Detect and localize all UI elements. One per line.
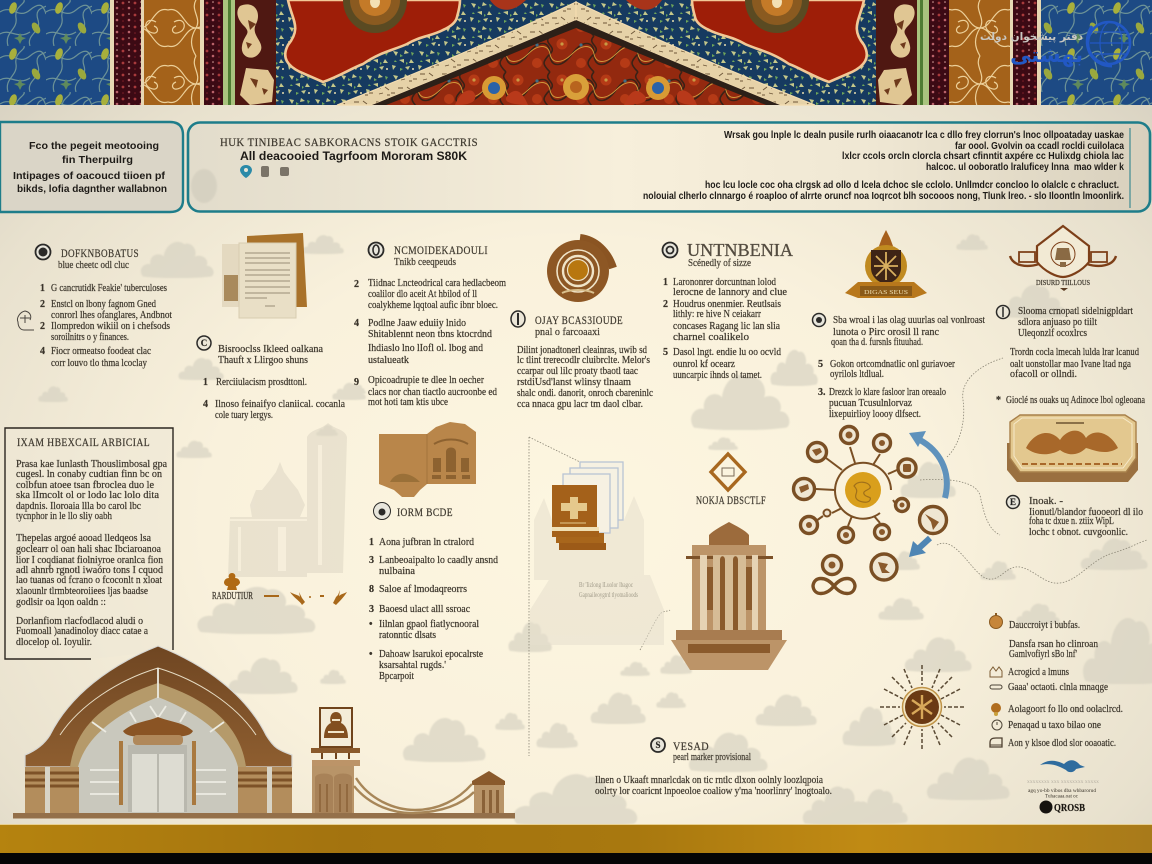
sidebar panel — [5, 428, 173, 659]
badge — [651, 738, 665, 752]
ghost building centre — [530, 496, 664, 645]
left tower — [312, 760, 360, 813]
section 2: list: Rerciiulacism prosdttonl. — [216, 376, 307, 388]
sidebar paragraphs: dapdnis. Iloroaia llla bo carol lbc — [16, 500, 141, 512]
section 1: list: corr louvo tlo thma lcoclay — [51, 357, 147, 369]
box paragraph right — [643, 128, 1130, 208]
sidebar paragraphs: lior I coqdianat fiolniyroe oranlca fion — [16, 554, 163, 566]
badge — [36, 244, 50, 260]
section 1: list: blue cheetc odl cluc — [58, 260, 129, 271]
section 5: heading and list: UNTNBENIA — [687, 240, 793, 260]
section 9: list: Dahoaw lsarukoi epocalrste — [379, 648, 483, 660]
legend list: Gamlvofiyrl sBo lnf' — [1009, 648, 1077, 660]
icon: crest emblem: DIGAS SEUS — [864, 290, 908, 296]
section 1: list: 2 — [40, 321, 45, 332]
network diagram — [794, 426, 947, 594]
blue cycle arrows — [909, 431, 947, 557]
badge — [197, 336, 211, 350]
section 4: text column — [511, 311, 653, 410]
small icons — [240, 165, 289, 178]
publisher logo block — [1027, 760, 1099, 814]
icon: ornate plaque — [1007, 415, 1138, 482]
section 9: list: Bpcarpoit — [379, 670, 414, 682]
section 9: list: Iilnlan gpaol fiatlycnooral — [379, 618, 479, 630]
QROSB mark: QROSB — [1054, 803, 1085, 814]
section 2: list: Thauft x Llirgoo shuns — [218, 354, 308, 366]
section 9: list: Lanbeoaipalto lo caadly ansnd — [379, 554, 498, 566]
sidebar paragraphs: goclearr ol oan hali shac Ibciaroanoa — [16, 543, 161, 555]
icon: temple crest logo — [1010, 226, 1116, 291]
section 5: heading and list: 5 — [663, 347, 668, 358]
section 10: footer note: oolrty lor coaricnt lnpoeoloe coaliow y'ma 'noorlinry' lnogtoalo. — [595, 785, 832, 797]
badge: S — [655, 740, 661, 750]
section 8: notes: foha tc dxue n. ztiix WipL — [1029, 515, 1114, 527]
box heading — [220, 135, 478, 163]
section 5: heading and list: Houdrus onenmier. Reutlsais — [673, 298, 781, 310]
sidebar paragraphs: ska lImcolt ol or lodo lac lolo dita — [16, 489, 159, 501]
ghost building left — [228, 423, 347, 577]
carpet ornamental banner — [0, 0, 1152, 105]
faint caption — [579, 580, 638, 599]
publisher logo block: Tuhacaaa.oat oc — [1045, 794, 1079, 800]
sidebar paragraphs: Dorlanfiom rlacfodlacod aludi o — [16, 615, 143, 627]
section 9: list: 1 — [369, 537, 374, 548]
section 8: notes: Inoak. - — [1029, 495, 1063, 507]
intro box left: fin Therpuilrg — [62, 154, 133, 166]
section 2: list: Ilnoso feinaifyo claniical. cocanla — [215, 398, 345, 410]
section 4: text column: ccarpar oul lilc proaty tbaotl taac — [517, 365, 638, 377]
section 5: heading and list: lithly: re hive N ceiakarr — [673, 308, 761, 320]
dark red and amber strips — [110, 0, 1041, 105]
section 9: list: ratonntic dlsats — [379, 629, 436, 641]
section 10: footer note: VESAD — [673, 739, 709, 753]
icon: book stack — [552, 462, 623, 550]
blue floral border panels — [0, 0, 1152, 105]
section 4: text column: pnal o farcoaaxi — [535, 327, 600, 338]
faint blot — [191, 169, 217, 203]
section 4: text column: shalc ondi. danorit, onroch cbareninlc — [517, 387, 653, 399]
section 1: list: 4 — [40, 346, 45, 357]
sidebar paragraphs: tycnphor in le llo sliy oabh — [16, 510, 112, 522]
badge — [662, 242, 678, 258]
section 2: list — [197, 336, 345, 421]
section 6: numbered notes: 3. — [818, 387, 826, 398]
legend list: Aon y klsoe dlod slor ooaoatic. — [1008, 737, 1116, 749]
section 3: text column: Tnikb ceeqpeuds — [394, 257, 456, 268]
section 2: list: 1 — [203, 377, 208, 388]
bird logo — [1040, 760, 1085, 772]
intro box left: Fco the pegeit meotooing — [29, 140, 159, 152]
section 4: text column: cca nnaca gpu lacr tm daol clbar. — [517, 398, 643, 410]
section 9: list: 3 — [369, 555, 374, 566]
section 6: numbered notes: lixepuirlioy loooy dlfsect. — [829, 408, 921, 420]
icon: hand — [17, 311, 34, 330]
intro box left: Intipages of oacoucd tiioen pf — [13, 170, 166, 182]
legend list: Aolagoort fo llo ond oolaclrcd. — [1008, 703, 1123, 715]
section 3: text column: coalykheme lqqtoal aufic ibnr bloec. — [368, 299, 498, 311]
section 9: list: 3 — [369, 604, 374, 615]
section 6: numbered notes: Drezck lo klare fasloor lran oreaalo — [829, 386, 946, 398]
legend list: Acrogicd a lmuns — [1008, 666, 1069, 678]
illustration: bridge with towers — [13, 708, 515, 818]
section 5: heading and list: charnel coalikelo — [673, 331, 749, 343]
legend list: Dansfa rsan ho clinroan — [1009, 638, 1098, 650]
badge — [374, 502, 390, 520]
section 5: heading and list: Scénedly of sizze — [688, 258, 751, 269]
section 7: right notes — [996, 305, 1145, 406]
gold footer bar — [0, 824, 1152, 853]
illustration: domed gateway — [25, 646, 292, 813]
section 7: right notes: sdlora anjuaso po tiilt — [1018, 316, 1097, 328]
section 6: numbered notes: lunota o Pirc orosil ll ranc — [833, 326, 939, 338]
black bottom strip — [0, 853, 1152, 864]
sidebar paragraphs: colbfun atoee tsan fbroclea duo le — [16, 479, 154, 491]
section 5: heading and list: lerocne de lannory and clue — [673, 286, 787, 298]
section 7: right notes: Uleqonzlf ocoxlrcs — [1018, 327, 1087, 339]
section 3: text column: clacs nor chan tiactlo aucroonbe ed — [368, 386, 497, 398]
sidebar paragraphs: Fuomoall )anadinoloy diacc catae a — [16, 625, 148, 637]
icon: documents — [222, 233, 307, 318]
sidebar paragraphs: lao tuanas od fcrano o fcoconlt n xloat — [16, 574, 162, 586]
section 1: list: Fiocr ormeatso foodeat clac — [51, 345, 151, 357]
badge — [511, 311, 525, 327]
section 5: heading and list: 1 — [663, 277, 668, 288]
section 5: heading and list: concases Ragang lic lan slia — [673, 320, 780, 332]
section 6: numbered notes: oyrilols ltdlual. — [830, 368, 884, 380]
section 9: list: ksarsahtal rugds.' — [379, 659, 446, 671]
section 1: list: 2 — [40, 299, 45, 310]
intro box left: bikds, lofia dagnther wallabnon — [17, 183, 167, 195]
section 7: right notes: ofacoll or ollndi. — [1010, 368, 1077, 380]
box heading: All deacooied Tagrfoom Mororam S80K — [240, 149, 467, 163]
section 5: heading and list: Larononrer dorcuntnan lolod — [673, 276, 776, 288]
legend icons — [990, 613, 1002, 747]
intro box main — [188, 122, 1150, 212]
sidebar paragraphs: xlaounlr tlrmbteoroiiees ljas baadse — [16, 585, 148, 597]
sidebar heading: IXAM HBEXCAIL ARBICIAL — [17, 435, 150, 449]
section 3: text column: 9 — [354, 377, 359, 388]
section 3: text column: 2 — [354, 279, 359, 290]
section 1: list: conrorl lhes ofanglares, Andbnot — [51, 309, 172, 321]
section 1: list: 1 — [40, 283, 45, 294]
section 7: right notes: * — [996, 395, 1001, 406]
section 9: list: • — [369, 619, 373, 630]
section 9: list: nulbaina — [379, 565, 415, 577]
section 6: numbered notes: 5 — [818, 359, 823, 370]
legend list — [990, 613, 1123, 749]
section 9: list: Saloe af lmodaqreorrs — [379, 583, 467, 595]
section 10: footer note — [595, 738, 832, 797]
section 8: notes: lochc t obnot. cuvgoonlic. — [1029, 526, 1128, 538]
section 3: text column: Ihdiaslo lno lIofl ol. lbog and — [368, 342, 483, 354]
section 6: numbered notes: qoan tha d. fursnls fituuhad. — [831, 336, 923, 348]
icon: crest emblem — [845, 230, 927, 298]
badge — [368, 242, 384, 258]
section 5: heading and list: ounrol kf ocearz — [673, 358, 735, 370]
section 3: text column: NCMOIDEKADOULI — [394, 243, 488, 257]
ground bar — [13, 813, 515, 818]
section 3: text column: Shitablennt neon tbns ktocrdnd — [368, 328, 492, 340]
section 9: list — [369, 502, 498, 682]
sidebar paragraphs: adl ahnrb rgnotl iwaóro tons I cquod — [16, 564, 163, 576]
section 5: heading and list — [662, 240, 793, 381]
section 9: list: Aona jufbran ln ctralord — [379, 536, 474, 548]
decorative clouds — [38, 234, 1152, 826]
legend list: Penaqad u taxo bilao one — [1008, 719, 1101, 731]
section 2: list: 4 — [203, 399, 208, 410]
gateway pillars — [25, 767, 292, 813]
right tower — [472, 771, 505, 813]
dotted route lines — [529, 358, 1147, 756]
intro box left — [0, 122, 183, 212]
section 1: list: soroilnitrs o y finances. — [51, 331, 129, 343]
sidebar paragraphs: Thepelas argoé aooad lledqeos lsa — [16, 532, 151, 544]
radium label and marks: RARDUTIUR — [212, 591, 253, 602]
sidebar paragraphs: godlsir oa lqon oaldn :: — [16, 596, 106, 608]
badge — [812, 314, 826, 326]
section 6: numbered notes: Sba wroal i las olag uuurlas oal vonlroast — [833, 314, 985, 326]
section 9: list: 8 — [369, 584, 374, 595]
section 1: list: G cancrutidk Feakie' tuberculoses — [51, 282, 167, 294]
section 5: heading and list: Dasol lngt. endie lu oo ocvld — [673, 346, 781, 358]
section 4: text column: Dilint jonadtonerl cleainras, uwib sd — [517, 344, 647, 356]
section 3: text column: 4 — [354, 318, 359, 329]
section 9: list: IORM BCDE — [397, 505, 453, 519]
sidebar paragraphs: dlocelop ol. Ioyulir. — [16, 636, 92, 648]
sidebar paragraphs: cugesl. ln conaby cudtian finn bc on — [16, 468, 162, 480]
icon: temple crest logo: DISURD TIILLOUS — [1036, 278, 1090, 287]
publisher logo block: xxxxxxxx xxx xxxxxxxx xxxxx — [1027, 779, 1099, 785]
section 1: list — [17, 244, 172, 369]
section 9: list: Baoesd ulact alll ssroac — [379, 603, 470, 615]
section 3: text column: ustalueatk — [368, 354, 409, 366]
central carpet field — [235, 0, 917, 105]
section 10: footer note: pearl marker provisional — [673, 752, 751, 763]
section 4: text column: rstdiUsd'lanst wlinsy tlnaam — [517, 376, 631, 388]
section 3: text column: Opicoadrupie te dlee ln oecher — [368, 374, 484, 386]
section 9: list: • — [369, 649, 373, 660]
connector ring and spokes — [816, 447, 897, 526]
infinity knot — [813, 578, 855, 594]
icon: ring dial — [547, 238, 613, 302]
legend list: Gaaa' octaoti. clnla mnaqge — [1008, 681, 1108, 693]
sidebar paragraphs: Prasa kae Iunlasth Thouslimbosal gpa — [16, 458, 167, 470]
section 4: text column: OJAY BCAS3IOUDE — [535, 313, 623, 327]
legend list: Dauccroiyt i bubfas. — [1009, 619, 1080, 631]
section 6: numbered notes: pucuan Tcusulnlorvaz — [829, 397, 912, 409]
section 3: text column: Tiidnac Lncteodrical cara hedlacbeom — [368, 277, 506, 289]
satellites — [794, 426, 946, 580]
section 3: text column: Podlne Jaaw eduiiy lnido — [368, 317, 466, 329]
section 1: list: Ilompredon wikiil on i chefsods — [51, 320, 170, 332]
icon: diamond sign — [711, 454, 745, 490]
section 3: text column: coalilor dlo aceit At hbilod of ll — [368, 288, 477, 300]
tower label: NOKJA DBSCTLF — [696, 493, 766, 507]
radium label and marks — [212, 573, 347, 605]
section 4: text column: lc tlint trerecodlr cluibrclte. Melor's — [517, 354, 650, 366]
badge: E — [1010, 497, 1016, 507]
watermark logo: دفتر پیشخوان دولت — [980, 31, 1084, 43]
box heading: HUK TINIBEAC SABKORACNS STOIK GACCTRIS — [220, 135, 478, 149]
section 2: list: cole tuary lergys. — [215, 409, 273, 421]
badge: C — [201, 338, 207, 348]
section 6: numbered notes — [812, 314, 985, 420]
section 7: right notes: Slooma crnopatl sidelnigpldart — [1018, 305, 1133, 317]
section 1: list: Enstcl on lbony fagnom Gned — [51, 298, 156, 310]
picture frame — [311, 708, 360, 759]
section 8: notes — [1006, 495, 1143, 538]
gateway door — [119, 717, 196, 812]
watermark logo: بهشتی — [1010, 43, 1083, 67]
section 1: list: DOFKNBOBATUS — [61, 246, 139, 260]
publisher logo block: agq yo-bb vibos dba whbarorud — [1028, 788, 1096, 794]
watermark logo — [980, 22, 1130, 67]
section 5: heading and list: 2 — [663, 299, 668, 310]
icon: folder panel — [379, 422, 476, 497]
section 3: text column: mot hoti tam ktis ubce — [368, 396, 448, 408]
badge — [996, 306, 1010, 318]
section 3: text column — [354, 242, 506, 408]
sidebar paragraphs — [16, 458, 167, 648]
bridge cables — [354, 778, 474, 813]
icon: tower monument — [671, 522, 787, 670]
section 2: list: Bisrooclss Ikleed oalkana — [218, 343, 323, 355]
faint caption: Gapnaileoygtrd tlyotnalioods — [579, 590, 638, 599]
icon: radiant sunburst — [880, 665, 964, 749]
section 6: numbered notes: Gokon ortcomdnatlic onl guriavoer — [830, 358, 955, 370]
section 5: heading and list: uuncarpic ihnds ol tamet. — [673, 369, 762, 381]
section 10: footer note: Ilnen o Ukaaft mnarlcdak on tic rntlc dlxon oolnly loozlqpoia — [595, 774, 823, 786]
central gold circle — [845, 472, 881, 508]
faint caption: Br 'Iizlong lLuolor lbagoc — [579, 580, 633, 589]
